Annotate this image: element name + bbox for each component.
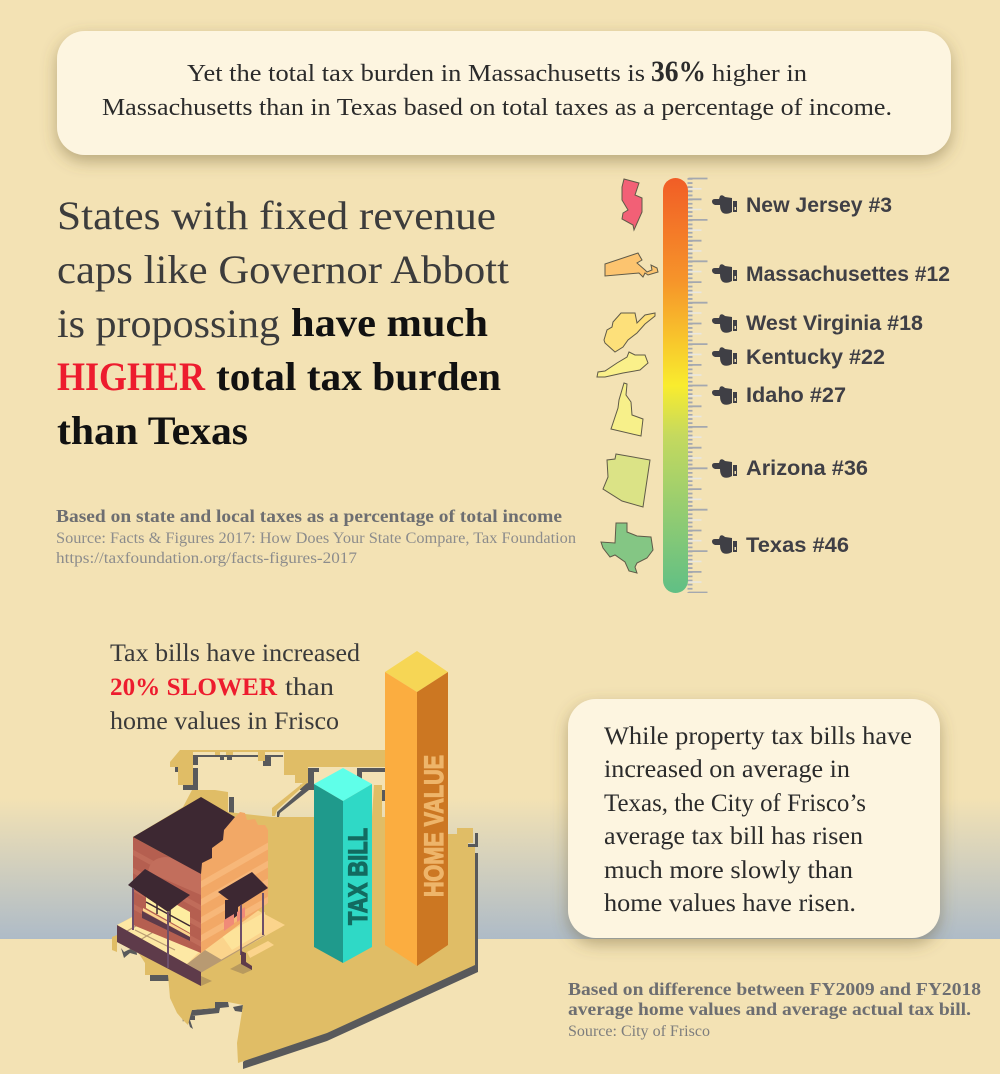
text: tax bills slower: home values in Frisco [110,708,339,735]
heading: fixed revenue caps: States with fixed revenue [57,193,496,238]
heading: fixed revenue caps: is propossing [57,301,280,346]
heading: fixed revenue caps: HIGHER [57,354,206,399]
text: tax bills slower [110,640,361,735]
bar: tax bill: TAX BILL [343,828,373,925]
label: Idaho: Idaho #27 [746,384,846,407]
sky band [0,798,1000,939]
source note: City of Frisco [568,979,981,1040]
source note: City of Frisco: Source: City of Frisco [568,1023,710,1040]
icon: Kentucky [597,352,648,377]
window [146,888,190,933]
callout: total tax burden: Massachusetts than in Texas based on total taxes as a percentage of income. [102,95,892,121]
left wall [133,837,201,953]
heading: fixed revenue caps: caps like Governor Abbott [57,247,509,292]
source note: tax foundation: Source: Facts & Figures 2017: How Does Your State Compare, Tax Foundation [56,530,576,547]
posts [133,888,263,968]
icon: West Virginia [604,313,655,352]
heading: fixed revenue caps: have much [291,300,488,345]
callout: total tax burden: 36% [651,55,706,88]
colour scale bar [663,178,688,593]
callout: Frisco tax bills: home values have risen. [604,890,856,917]
callout: Frisco tax bills: increased on average in [604,756,851,783]
icon: Arizona [603,454,650,507]
source note: City of Frisco: average home values and average actual tax bill. [568,999,971,1019]
awnings [128,869,190,912]
bar: tax bill [314,768,373,963]
text: tax bills slower: than [285,674,335,701]
source note: City of Frisco: Based on difference between FY2009 and FY2018 [568,979,981,999]
source note: tax foundation [56,506,576,567]
platform [117,880,285,972]
icon: Texas [601,523,653,573]
bar: home value: HOME VALUE [419,755,449,897]
scale ruler ticks [690,178,698,593]
state outlines [597,179,658,573]
heading: fixed revenue caps [57,193,509,453]
label: Arizona: Arizona #36 [746,457,868,480]
heading: fixed revenue caps: total tax burden [216,354,501,399]
label: Texas: Texas #46 [746,534,849,557]
icon: New Jersey [622,179,642,230]
door [225,900,238,925]
ranking labels [712,194,950,557]
callout: total tax burden: higher in [712,61,807,87]
source note: tax foundation: https://taxfoundation.org/facts-figures-2017 [56,550,357,567]
steps [247,941,274,958]
map of Frisco [112,750,478,1069]
label: New Jersey: New Jersey #3 [746,194,892,217]
label: West Virginia: West Virginia #18 [746,312,923,335]
callout: Frisco tax bills: much more slowly than [604,857,854,884]
text: tax bills slower: Tax bills have increased [110,640,361,667]
label: Kentucky: Kentucky #22 [746,346,885,369]
text: tax bills slower: 20% SLOWER [110,674,278,701]
callout: Frisco tax bills [568,699,940,938]
callout: total tax burden [57,31,951,155]
icon: Idaho [611,383,643,436]
base shadow [117,930,212,986]
source note: tax foundation: Based on state and local taxes as a percentage of total income [56,506,562,526]
callout: Frisco tax bills: Texas, the City of Frisco’s [604,790,866,817]
callout: total tax burden: Yet the total tax burden in Massachusetts is [187,61,645,87]
right wall [201,812,268,953]
illustration: house [117,797,285,986]
heading: fixed revenue caps: than Texas [57,408,248,453]
callout: Frisco tax bills: average tax bill has risen [604,823,864,850]
roof [133,797,235,874]
bar: home value [385,651,449,966]
base side [117,925,201,986]
callout: Frisco tax bills: While property tax bills have [604,723,912,750]
icon: Massachusetts [605,253,658,277]
label: Massachusettes: Massachusettes #12 [746,263,950,286]
